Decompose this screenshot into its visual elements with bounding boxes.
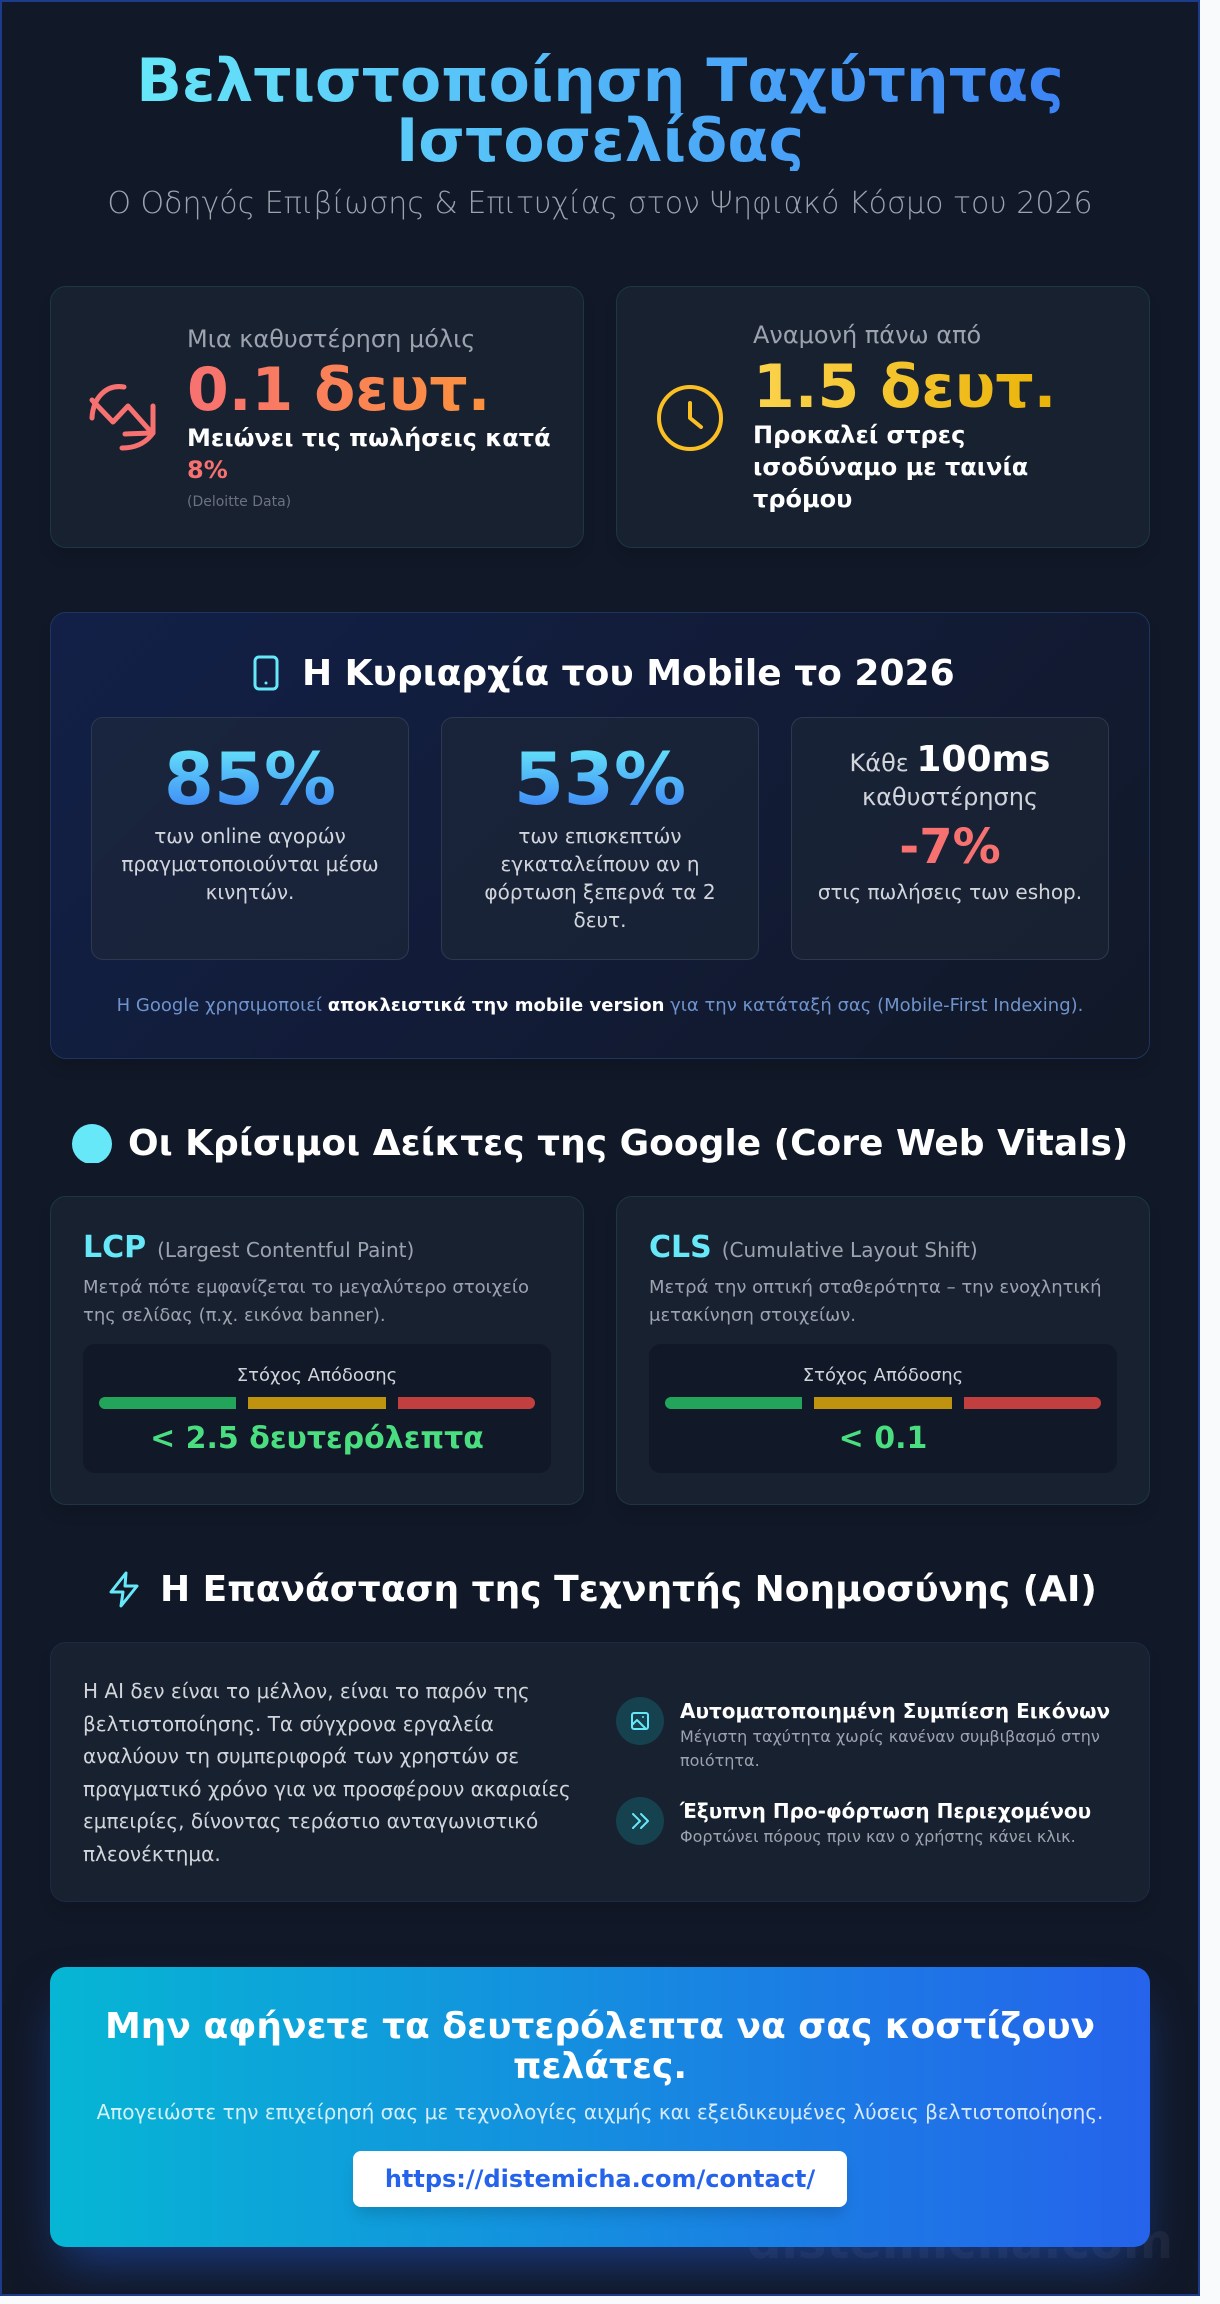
label: Στόχος Απόδοσης [803,1365,963,1386]
icon: image compression [616,1697,664,1745]
stat card: 85% [91,717,409,960]
stat lead-in: Κάθε 100ms [850,739,1050,780]
green segment [665,1397,802,1409]
stat value [92,743,408,815]
text: stress impact [753,421,1028,513]
AI paragraph: πραγματικό χρόνο για να προσφέρουν ακαριαίες [83,1776,571,1800]
stat value: 53% [514,737,686,821]
watermark: distemicha.com [747,2214,1173,2270]
metric description: Μετρά την οπτική σταθερότητα – την ενοχλητική [649,1277,1102,1298]
metric description: Μετρά πότε εμφανίζεται το μεγαλύτερο στοιχείο [83,1277,529,1298]
icon: predictive preload [616,1797,664,1845]
stat caption: των online αγορών [154,824,346,848]
stat: 1.5 seconds: 1.5 δευτ. [753,352,1056,422]
metric name: CLS (Cumulative Layout Shift) [649,1230,978,1265]
target value: < 2.5 δευτερόλεπτα [150,1421,484,1456]
feature: image compression [680,1699,1110,1770]
note: mobile-first indexing: Η Google χρησιμοποιεί αποκλειστικά την mobile version για την κατάταξή σας (Mobile-First Indexing). [117,995,1083,1016]
stat value: 85% [164,737,336,821]
heading: mobile: Η Κυριαρχία του Mobile το 2026 [302,653,955,694]
feature title: Έξυπνη Προ-φόρτωση Περιεχομένου [680,1799,1091,1823]
AI paragraph: πλεονέκτημα. [83,1842,221,1866]
yellow segment [248,1397,386,1409]
AI paragraph: Η AI δεν είναι το μέλλον, είναι το παρόν της [83,1679,530,1703]
panel: LCP target [83,1344,551,1473]
stat: 0.1 seconds: 0.1 δευτ. [187,355,490,425]
subtitle: Ο Οδηγός Επιβίωσης & Επιτυχίας στον Ψηφιακό Κόσμο του 2026 [107,186,1093,221]
heading: AI: Η Επανάσταση της Τεχνητής Νοημοσύνης (AI) [160,1569,1097,1610]
icon: vitals dot [72,1124,112,1163]
CTA button: https://distemicha.com/contact/ [385,2165,815,2193]
AI paragraph [83,1679,571,1866]
metric name: LCP (Largest Contentful Paint) [83,1230,414,1265]
stat value [442,743,758,815]
stat card: 53% [441,717,759,960]
metric description [83,1277,529,1326]
icon: clock [657,385,723,451]
feature text: ποιότητα. [680,1751,760,1770]
AI paragraph: βελτιστοποίησης. Τα σύγχρονα εργαλεία [83,1712,494,1736]
metric description [649,1277,1102,1326]
panel: LCP [50,1196,584,1505]
text: stress impact: τρόμου [753,485,852,513]
target value: < 0.1 [839,1421,927,1456]
panel: CLS [616,1196,1150,1505]
icon: lightning bolt [109,1572,139,1608]
panel: mobile dominance [50,612,1150,1059]
heading: core web vitals: Οι Κρίσιμοι Δείκτες της Google (Core Web Vitals) [128,1123,1128,1164]
AI paragraph: εμπειρίες, δίνοντας τεράστιο ανταγωνιστικό [83,1809,538,1833]
text: sales impact: 8% [187,456,228,484]
feature text: Μέγιστη ταχύτητα χωρίς κανέναν συμβιβασμό στην [680,1727,1100,1746]
feature: predictive preload [680,1799,1091,1846]
text: delay label: Μια καθυστέρηση μόλις [187,325,475,353]
panel: stress stat [616,286,1150,548]
CTA button [353,2151,847,2207]
stat caption: στις πωλήσεις των eshop. [818,880,1082,904]
panel: sales delay stat [50,286,584,548]
label: Στόχος Απόδοσης [237,1365,397,1386]
stat caption: κινητών. [206,880,294,904]
feature text: Φορτώνει πόρους πριν καν ο χρήστης κάνει κλικ. [680,1827,1076,1846]
stat value: -7% [899,819,1001,875]
feature title: Αυτοματοποιημένη Συμπίεση Εικόνων [680,1699,1110,1723]
text: sales impact: Μειώνει τις πωλήσεις κατά [187,424,551,452]
red segment [964,1397,1101,1409]
text: source: (Deloitte Data) [187,494,291,510]
stat caption: πραγματοποιούνται μέσω [121,852,379,876]
yellow segment [814,1397,952,1409]
metric description: μετακίνηση στοιχείων. [649,1305,856,1326]
panel: AI [50,1642,1150,1902]
stat caption: φόρτωση ξεπερνά τα 2 [484,880,716,904]
text: stress impact: Προκαλεί στρες [753,421,965,449]
stat caption: εγκαταλείπουν αν η [500,852,700,876]
stat caption: των επισκεπτών [518,824,682,848]
green segment [99,1397,236,1409]
panel: CLS target [649,1344,1117,1473]
text: waiting label: Αναμονή πάνω από [753,321,981,349]
stat lead-in second line: καθυστέρησης [862,783,1038,811]
title: Βελτιστοποίηση Ταχύτητας Ιστοσελίδας [136,46,1064,176]
stat card: 100ms [791,717,1109,960]
feature text [680,1727,1100,1770]
icon: trending down [90,384,156,450]
AI paragraph: αναλύουν τη συμπεριφορά των χρηστών σε [83,1744,519,1768]
stat caption [484,824,716,932]
text: sales impact [187,424,551,484]
stat caption: δευτ. [573,908,627,932]
red segment [398,1397,535,1409]
CTA text: Απογειώστε την επιχείρησή σας με τεχνολογίες αιχμής και εξειδικευμένες λύσεις βελτιστοποίησης. [97,2100,1103,2124]
icon: phone [254,656,278,690]
text: stress impact: ισοδύναμο με ταινία [753,453,1028,481]
metric description: της σελίδας (π.χ. εικόνα banner). [83,1305,386,1326]
stat caption [121,824,379,904]
panel: call to action [50,1967,1150,2247]
CTA heading: Μην αφήνετε τα δευτερόλεπτα να σας κοστίζουν πελάτες. [105,2006,1095,2087]
